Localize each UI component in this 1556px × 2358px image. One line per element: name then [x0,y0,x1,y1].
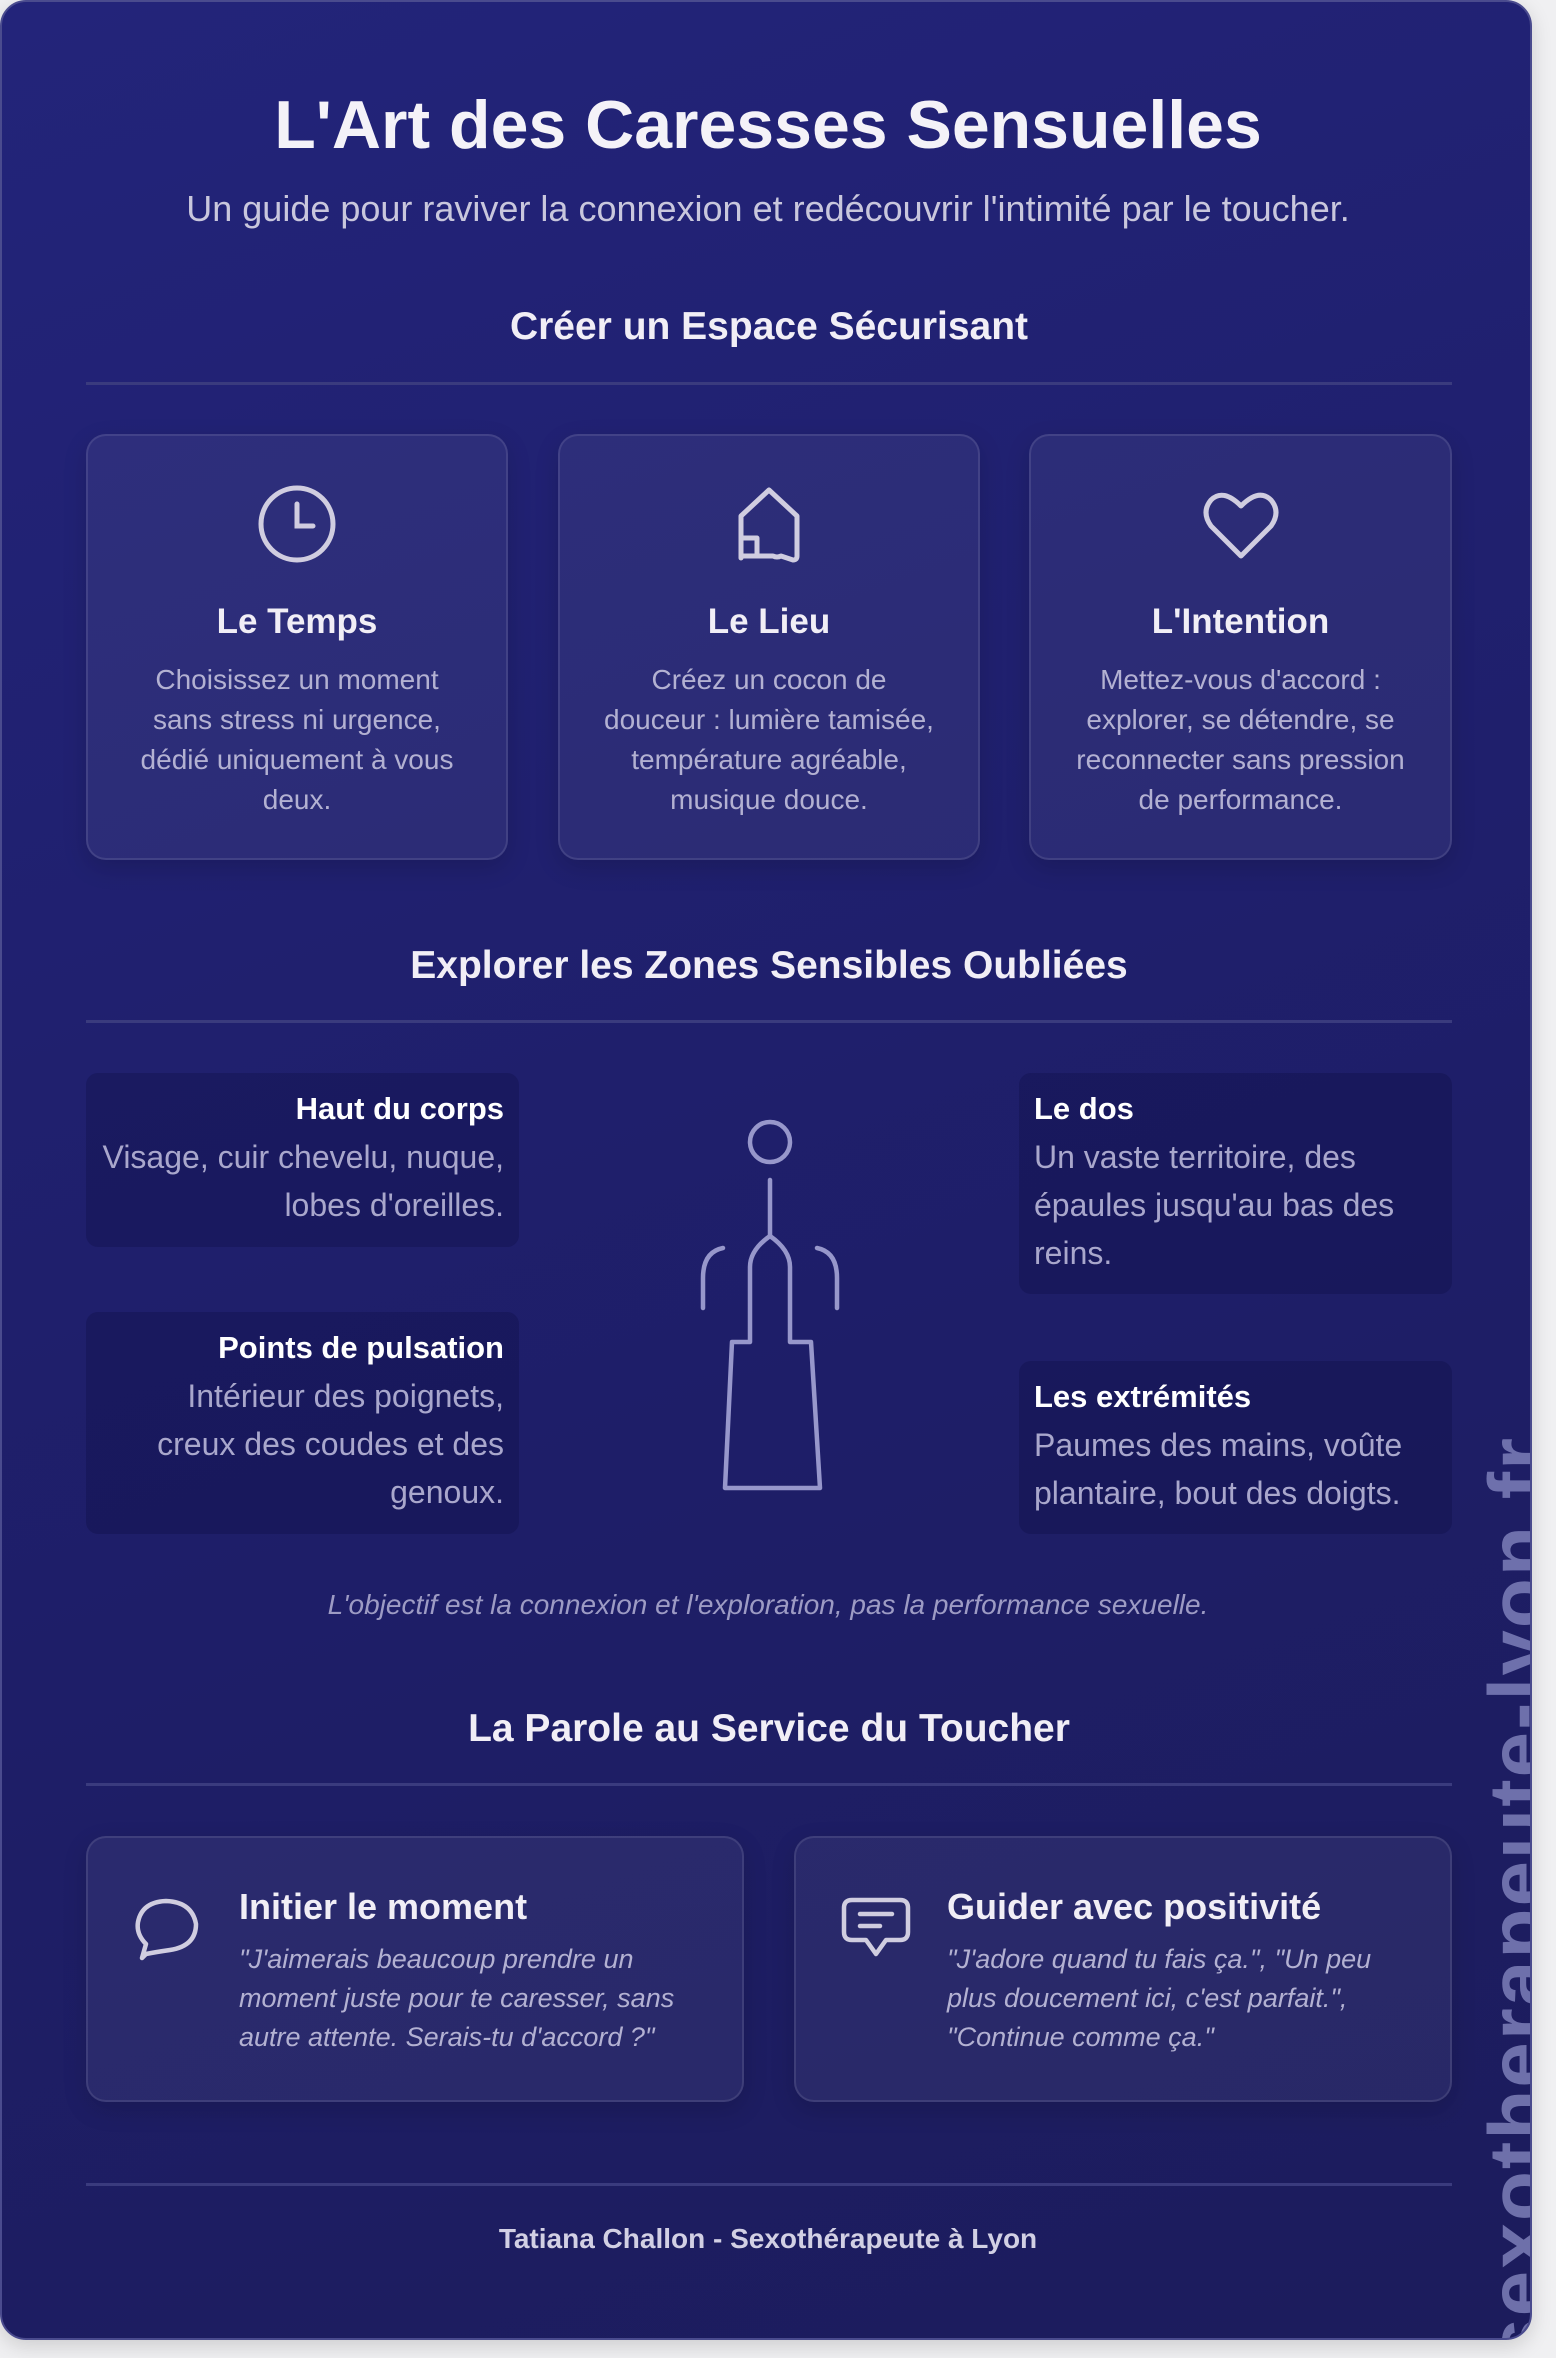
panel: le lieu: Créez un cocon de douceur : lumière tamisée, température agréable, musique douce. [604,664,934,815]
heading: espace: Créer un Espace Sécurisant [510,305,1028,348]
subtitle: Un guide pour raviver la connexion et redécouvrir l'intimité par le toucher. [186,188,1350,229]
icon: heart [1203,492,1279,558]
icon: house [738,487,800,562]
heading: parole: La Parole au Service du Toucher [468,1707,1070,1750]
icon: message [842,1898,910,1956]
panel: initier: Initier le moment [239,1886,527,1927]
zone: extremites [1019,1361,1452,1534]
zone: extremites: Paumes des mains, voûte plantaire, bout des doigts. [1034,1427,1402,1511]
panel: guider: Guider avec positivité [947,1886,1321,1927]
icon: body figure [700,1120,840,1490]
zone: dos: Le dos [1034,1091,1134,1126]
title: L'Art des Caresses Sensuelles [274,87,1262,163]
icon: speech bubble [135,1898,198,1960]
heading: zones: Explorer les Zones Sensibles Oubliées [410,944,1128,987]
panel: le lieu [558,434,980,860]
note: L'objectif est la connexion et l'exploration, pas la performance sexuelle. [328,1589,1208,1620]
zone: haut du corps [86,1073,519,1247]
zone: haut du corps: Haut du corps [296,1091,504,1126]
icon: clock [258,486,336,562]
zone: dos [1019,1073,1452,1294]
zone: haut du corps: Visage, cuir chevelu, nuque, lobes d'oreilles. [103,1139,504,1223]
panel: guider: "J'adore quand tu fais ça.", "Un peu plus doucement ici, c'est parfait.", "Continue comme ça." [947,1944,1371,2052]
zone: dos: Un vaste territoire, des épaules jusqu'au bas des reins. [1034,1139,1394,1271]
panel: initier: "J'aimerais beaucoup prendre un moment juste pour te caresser, sans autre attente. Serais-tu d'accord ?" [239,1944,674,2052]
panel: intention [1029,434,1452,860]
panel: intention: L'Intention [1152,602,1329,641]
panel: le temps [86,434,508,860]
panel: le temps: Le Temps [217,602,377,641]
zone: pulsation [86,1312,519,1534]
footer: Tatiana Challon - Sexothérapeute à Lyon [499,2223,1037,2254]
zone: pulsation: Points de pulsation [218,1330,504,1365]
panel: le lieu: Le Lieu [708,602,830,641]
panel: guider [794,1836,1452,2102]
panel: intention: Mettez-vous d'accord : explorer, se détendre, se reconnecter sans pression de performance. [1076,664,1405,815]
panel: le temps: Choisissez un moment sans stress ni urgence, dédié uniquement à vous deux. [141,664,453,815]
zone: extremites: Les extrémités [1034,1379,1251,1414]
zone: pulsation: Intérieur des poignets, creux des coudes et des genoux. [157,1378,504,1510]
panel: initier [86,1836,744,2102]
